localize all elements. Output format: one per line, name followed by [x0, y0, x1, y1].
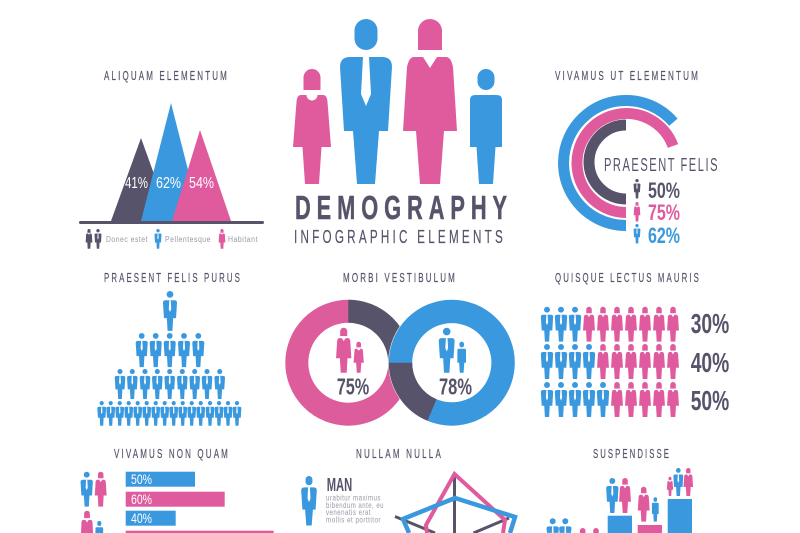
- bar 60%: [126, 491, 225, 507]
- legend icon: pink woman: [219, 229, 225, 249]
- triangle: dark 41%: [111, 138, 171, 221]
- legend icon: blue man: [155, 229, 161, 249]
- panel: nullam nulla radar: [301, 446, 515, 533]
- stat row: dark 50%: [634, 178, 680, 203]
- panel: vivamus ut elementum radial chart: [555, 68, 719, 248]
- arc: dark: [589, 125, 626, 199]
- icon: boy figure: [470, 69, 502, 184]
- bar 60%: 60%: [131, 491, 152, 507]
- heading: MORBI VESTIBULUM: [343, 270, 457, 285]
- bar 50%: [126, 471, 195, 487]
- icon: man: [301, 476, 317, 526]
- legend label: Donec estet: Donec estet: [106, 235, 148, 244]
- row 40%: 40%: [691, 347, 729, 378]
- heading: QUISQUE LECTUS MAURIS: [555, 270, 701, 285]
- icon: woman figure: [403, 19, 457, 184]
- arc: pink: [577, 114, 673, 212]
- heading: NULLAM NULLA: [356, 446, 443, 461]
- panel: central demography hero: [293, 19, 513, 247]
- heading: SUSPENDISSE: [593, 446, 671, 461]
- panel: morbi vestibulum donut charts: [297, 270, 515, 426]
- row 40%: [541, 344, 729, 379]
- row 30%: [541, 307, 729, 342]
- heading: ALIQUAM ELEMENTUM: [104, 68, 229, 83]
- row 30%: 30%: [691, 308, 729, 339]
- stat row: pink 75%: 75%: [648, 200, 680, 225]
- stat row: blue 62%: 62%: [648, 223, 680, 248]
- value 75%: 75%: [337, 374, 369, 400]
- donut: right 78%: [388, 299, 515, 426]
- icons: woman and boy: [81, 511, 103, 533]
- stat row: pink 75%: [634, 200, 680, 225]
- bar: cropped pink: [126, 531, 274, 533]
- heading: PRAESENT FELIS PURUS: [104, 270, 242, 285]
- pyramid of men: [97, 291, 241, 426]
- description text: urabitur maximus: [326, 494, 381, 503]
- label 54%: 54%: [189, 175, 214, 192]
- label 41%: 41%: [125, 175, 148, 192]
- stat row: blue 62%: [634, 223, 680, 248]
- description text: venenatis erat: [326, 508, 371, 517]
- panel: suspendisse podium chart: [547, 446, 693, 533]
- label: man: MAN: [327, 475, 352, 495]
- label 62%: 62%: [156, 175, 181, 192]
- figures: woman and girl: [336, 328, 364, 373]
- legend label: Habitant: Habitant: [228, 235, 258, 244]
- description text: [326, 494, 384, 524]
- subtitle: INFOGRAPHIC ELEMENTS: [294, 227, 506, 247]
- heading: VIVAMUS NON QUAM: [114, 446, 230, 461]
- legend label: Pellentesque: Pellentesque: [165, 235, 211, 244]
- axis baseline: [79, 221, 264, 224]
- bar 40%: [126, 510, 176, 526]
- radar chart: [395, 473, 515, 533]
- figures: man and boy: [439, 328, 466, 373]
- legend icons: dark pair: [86, 229, 101, 249]
- arc: blue: [564, 101, 673, 226]
- legend: [86, 229, 258, 249]
- description text: mollis et porttitor: [326, 516, 381, 524]
- triangle: blue 62%: [141, 103, 201, 221]
- bar 50%: 50%: [131, 471, 152, 487]
- podium: blue middle: [608, 516, 632, 533]
- value 78%: 78%: [439, 374, 472, 400]
- panel: aliquam elementum triangle chart: [79, 68, 264, 249]
- panel: quisque lectus mauris people grid: [541, 270, 729, 417]
- label: praesent felis: PRAESENT FELIS: [604, 155, 719, 175]
- row 50%: [541, 382, 729, 417]
- panel: praesent felis purus people pyramid: [97, 270, 242, 426]
- icon: man figure: [340, 19, 392, 184]
- title: DEMOGRAPHY: [295, 189, 513, 226]
- description text: bibendum ante, eu: [326, 501, 384, 510]
- donut: left 75%: [297, 311, 400, 414]
- figures lower left: [547, 518, 599, 533]
- icon: girl figure: [293, 69, 331, 184]
- bar 40%: 40%: [131, 510, 152, 526]
- figures on podiums: [606, 468, 693, 522]
- podium: pink: [638, 525, 662, 533]
- icons: man and woman: [81, 472, 107, 507]
- panel: vivamus non quam bars: [81, 446, 274, 533]
- podium: blue tall: [668, 499, 692, 533]
- row 50%: 50%: [691, 385, 729, 416]
- triangle: pink 54%: [172, 130, 231, 221]
- stat row: dark 50%: 50%: [648, 178, 680, 203]
- heading: VIVAMUS UT ELEMENTUM: [555, 68, 700, 83]
